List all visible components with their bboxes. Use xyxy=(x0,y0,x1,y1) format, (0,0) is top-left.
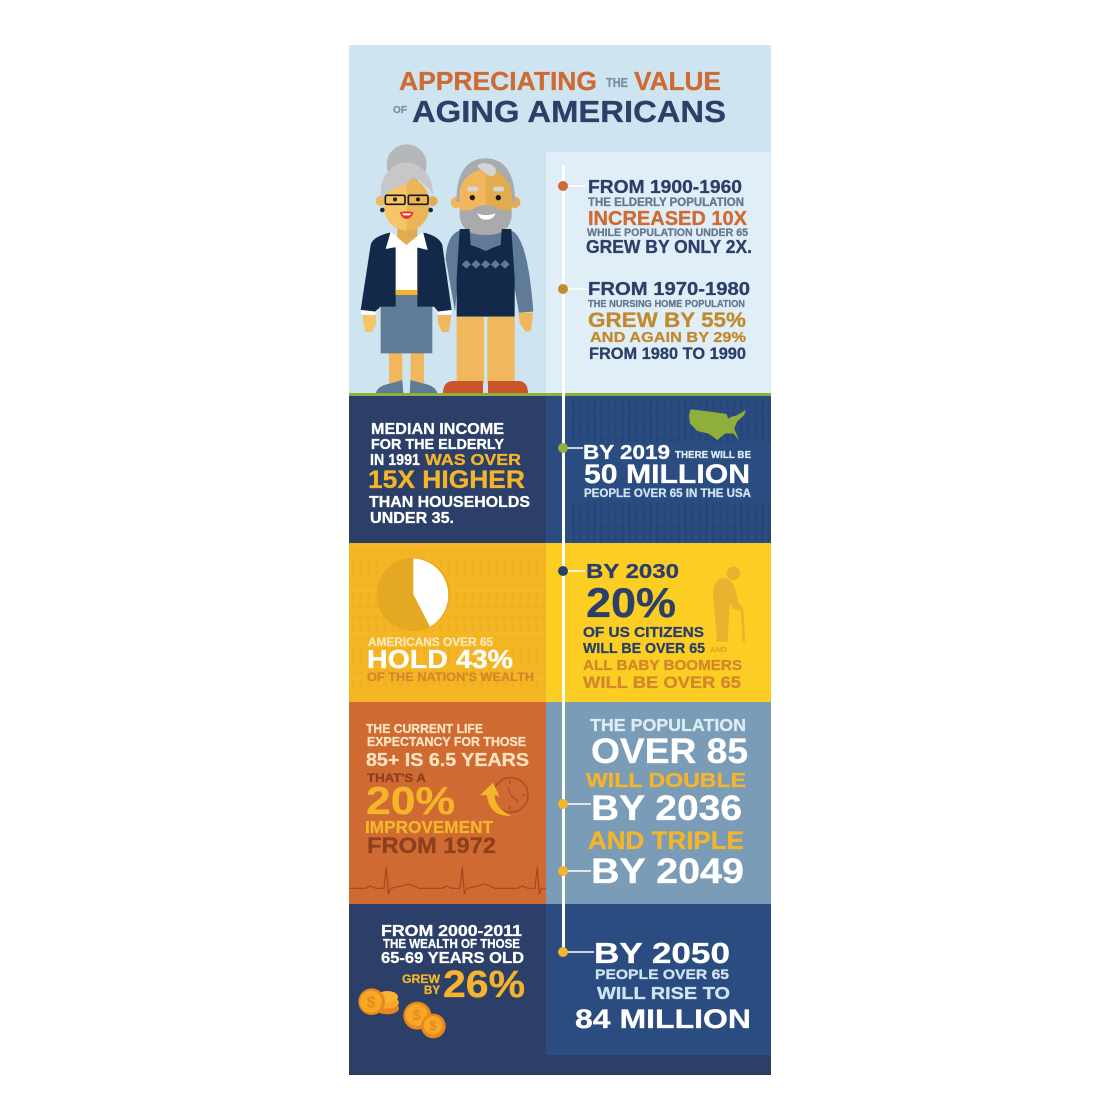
text block: median income: UNDER 35. xyxy=(370,510,454,527)
timeline marker: 2030 xyxy=(558,566,568,576)
text block: over 85: WILL DOUBLE xyxy=(586,769,746,792)
icon: clock with arrow xyxy=(480,778,528,816)
text block: 1970-1980 nursing homes: GREW BY 55% xyxy=(588,309,746,332)
text block: wealth grew: GREW xyxy=(402,973,440,986)
text block: median income: MEDIAN INCOME xyxy=(371,421,504,438)
text block: median income: 15X HIGHER xyxy=(368,467,525,494)
panel: 50 million by 2019 xyxy=(546,396,771,543)
timeline xyxy=(558,165,594,957)
text block: over 85: BY 2036 xyxy=(591,789,742,828)
text block: 50 million: 50 MILLION xyxy=(584,459,750,489)
panel: life expectancy xyxy=(349,702,546,904)
title xyxy=(393,68,726,129)
icon: gold coins: $ xyxy=(367,994,376,1011)
panel: 84 million by 2050 xyxy=(546,904,771,1055)
icon: gold coins xyxy=(358,988,446,1038)
text block: 1970-1980 nursing homes xyxy=(588,278,750,363)
text block: median income: FOR THE ELDERLY xyxy=(371,437,504,453)
text block: 50 million xyxy=(583,442,752,500)
text block: 84 million: BY 2050 xyxy=(594,938,730,970)
text block: wealth grew: THE WEALTH OF THOSE xyxy=(383,937,520,951)
illustration: elderly man xyxy=(443,158,533,393)
text block: 2030: ALL BABY BOOMERS xyxy=(583,657,742,674)
text block: 2030 xyxy=(583,561,742,692)
text block: over 85: BY 2049 xyxy=(591,852,744,891)
text block: life expectancy: THE CURRENT LIFE xyxy=(366,721,483,736)
text block: 1900-1960 population: WHILE POPULATION UNDER 65 xyxy=(587,227,748,239)
text block: life expectancy: 85+ IS 6.5 YEARS xyxy=(366,750,529,770)
pie chart: 43 percent xyxy=(377,558,450,631)
timeline marker: 2049 xyxy=(558,866,568,876)
text block: 2030: WILL BE OVER 65 xyxy=(583,641,705,657)
text block: hold 43%: AMERICANS OVER 65 xyxy=(368,636,494,649)
text block: life expectancy: FROM 1972 xyxy=(367,833,496,858)
text block: 84 million xyxy=(575,938,751,1034)
title: OF xyxy=(393,105,407,116)
text block: life expectancy xyxy=(365,721,529,858)
text block: median income: WAS OVER xyxy=(425,452,521,469)
text block: 1900-1960 population: THE ELDERLY POPULATION xyxy=(588,196,744,209)
text block: over 85: AND TRIPLE xyxy=(588,827,744,855)
text block: 1970-1980 nursing homes: THE NURSING HOME POPULATION xyxy=(588,298,745,310)
text block: hold 43% xyxy=(367,636,534,684)
text block: 50 million: PEOPLE OVER 65 IN THE USA xyxy=(584,487,752,500)
title: APPRECIATING xyxy=(399,68,597,96)
panel: wealth growth xyxy=(349,904,771,1075)
icon: gold coins: $ xyxy=(429,1018,437,1033)
text block: 1900-1960 population: INCREASED 10X xyxy=(588,208,748,230)
timeline marker: 1970 xyxy=(558,284,568,294)
text block: over 85: OVER 85 xyxy=(591,732,748,771)
text block: life expectancy: THAT'S A xyxy=(367,773,426,785)
text block: 84 million: 84 MILLION xyxy=(575,1004,751,1034)
text block: 2030: OF US CITIZENS xyxy=(583,625,704,641)
text block: over 85 xyxy=(586,715,748,891)
icon: elderly person with cane xyxy=(713,567,745,642)
panel: wealth share xyxy=(349,543,546,702)
text block: 84 million: PEOPLE OVER 65 xyxy=(595,966,729,982)
divider: green ground line xyxy=(349,393,771,396)
title: AGING AMERICANS xyxy=(412,94,726,129)
text block: wealth grew: FROM 2000-2011 xyxy=(381,923,522,940)
text block: 1970-1980 nursing homes: FROM 1980 TO 1990 xyxy=(589,344,746,363)
text block: 2030: WILL BE OVER 65 xyxy=(583,673,741,692)
timeline marker: 2019 xyxy=(558,443,568,453)
icon: USA map xyxy=(689,409,746,440)
title: VALUE xyxy=(634,68,721,96)
text block: life expectancy: 20% xyxy=(366,780,455,823)
text block: hold 43%: HOLD 43% xyxy=(367,646,513,674)
panel: header and seniors xyxy=(349,45,771,395)
text block: 1900-1960 population: FROM 1900-1960 xyxy=(588,176,742,197)
illustration: elderly woman xyxy=(361,144,452,393)
text block: wealth grew: 26% xyxy=(443,964,525,1006)
text block: 1900-1960 population xyxy=(586,176,752,257)
title: THE xyxy=(606,76,628,90)
text block: 2030: 20% xyxy=(586,579,676,626)
text block: median income: THAN HOUSEHOLDS xyxy=(369,494,530,511)
text block: 1900-1960 population: GREW BY ONLY 2X. xyxy=(586,236,752,257)
text block: 1970-1980 nursing homes: AND AGAIN BY 29% xyxy=(590,329,746,346)
text block: 2030: BY 2030 xyxy=(586,561,679,583)
panel: timeline facts background xyxy=(546,152,771,394)
text block: 50 million: BY 2019 xyxy=(583,442,670,464)
text block: over 85: THE POPULATION xyxy=(590,715,746,735)
text block: hold 43%: OF THE NATION'S WEALTH xyxy=(367,670,534,684)
text block: 50 million: THERE WILL BE xyxy=(675,450,751,461)
text block: life expectancy: EXPECTANCY FOR THOSE xyxy=(367,735,526,749)
text block: wealth grew: 65-69 YEARS OLD xyxy=(381,950,524,967)
text block: median income: IN 1991 xyxy=(370,452,420,469)
icon: gold coins: $ xyxy=(413,1008,421,1024)
text block: 2030: AND xyxy=(710,647,727,654)
panel: population over 85 xyxy=(546,702,771,904)
text block: 1970-1980 nursing homes: FROM 1970-1980 xyxy=(588,278,750,299)
text block: wealth grew xyxy=(381,923,525,1006)
panel: median income xyxy=(349,396,546,543)
timeline marker: 2036 xyxy=(558,799,568,809)
text block: median income xyxy=(368,421,530,527)
icon: heartbeat line xyxy=(349,867,546,894)
timeline marker: 1900 xyxy=(558,181,568,191)
text block: wealth grew: BY xyxy=(424,984,440,997)
panel: by 2030 xyxy=(546,543,771,702)
text block: life expectancy: IMPROVEMENT xyxy=(365,817,493,837)
text block: 84 million: WILL RISE TO xyxy=(597,983,730,1003)
timeline marker: 2050 xyxy=(558,947,568,957)
